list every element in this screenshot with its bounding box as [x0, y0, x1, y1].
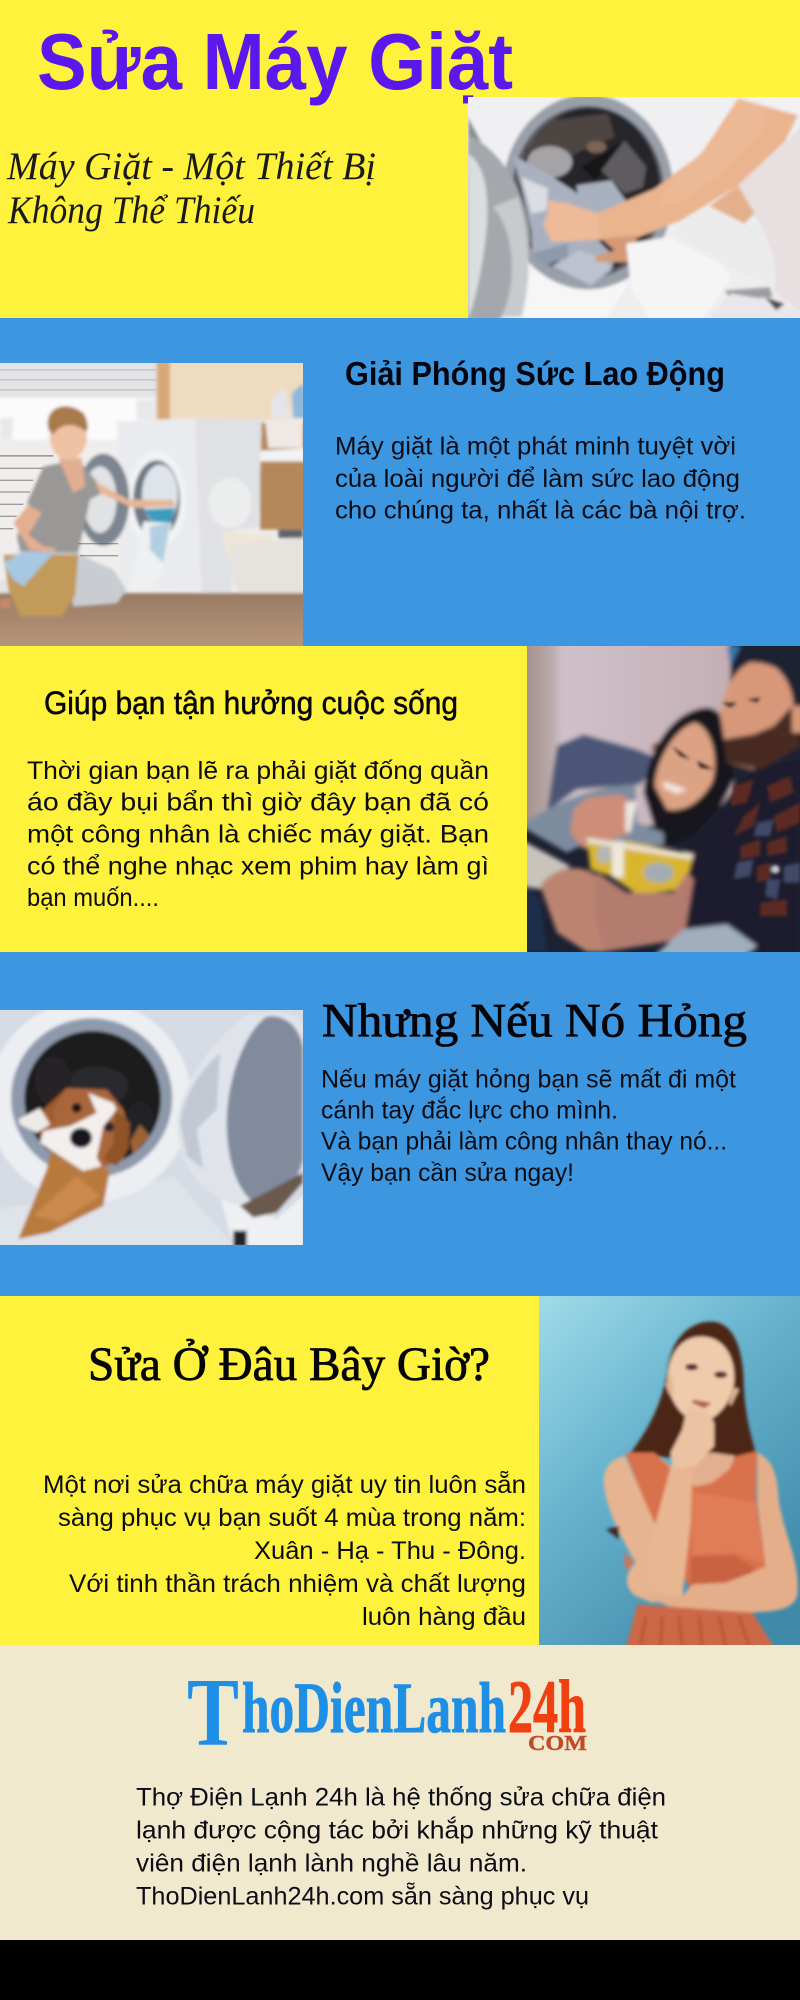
body text: viên điện lạnh lành nghề lâu năm. [136, 1850, 527, 1878]
body text: Thợ Điện Lạnh 24h là hệ thống sửa chữa điện [136, 1783, 666, 1811]
logo: hoDienLanh [242, 1668, 506, 1748]
body text: áo đầy bụi bẩn thì giờ đây bạn đã có [27, 788, 489, 816]
body text [335, 432, 746, 524]
body text: sàng phục vụ bạn suốt 4 mùa trong năm: [58, 1504, 526, 1532]
heading: Nhưng Nếu Nó Hỏng [322, 994, 747, 1048]
subtitle [6, 145, 376, 232]
photo: dog in washing machine [0, 1010, 303, 1245]
body text: Xuân - Hạ - Thu - Đông. [254, 1537, 526, 1565]
body text [27, 757, 489, 912]
logo [187, 1659, 587, 1767]
body text: cánh tay đắc lực cho mình. [321, 1096, 618, 1124]
body text: Thời gian bạn lẽ ra phải giặt đống quần [27, 757, 489, 785]
panel: freeing labour [0, 318, 800, 653]
heading: Giúp bạn tận hưởng cuộc sống [44, 685, 458, 721]
panel: enjoy life [0, 639, 800, 956]
body text: cho chúng ta, nhất là các bà nội trợ. [335, 496, 746, 524]
subtitle: Không Thể Thiếu [7, 189, 255, 232]
logo: T [187, 1659, 239, 1767]
body text: Với tinh thần trách nhiệm và chất lượng [69, 1570, 526, 1598]
body text [321, 1065, 736, 1187]
body text: bạn muốn.... [27, 884, 159, 912]
body text [43, 1470, 526, 1631]
body text: luôn hàng đầu [362, 1603, 526, 1631]
logo: 24h [508, 1666, 586, 1749]
heading: Giải Phóng Sức Lao Động [345, 355, 725, 392]
body text: một công nhân là chiếc máy giặt. Bạn [27, 820, 489, 848]
body text [136, 1783, 666, 1911]
logo: COM [528, 1731, 587, 1755]
panel: company footer [0, 1645, 800, 1940]
heading: Sửa Ở Đâu Bây Giờ? [88, 1338, 490, 1391]
title: Sửa Máy Giặt [37, 17, 513, 106]
body text: có thể nghe nhạc xem phim hay làm gì [27, 852, 489, 880]
body text: ThoDienLanh24h.com sẵn sàng phục vụ [136, 1882, 589, 1911]
panel: header [0, 0, 800, 327]
panel: where to repair [0, 1296, 800, 1649]
body text: lạnh được cộng tác bởi khắp những kỹ thuật [136, 1816, 658, 1844]
bottom black band [0, 1940, 800, 2000]
subtitle: Máy Giặt - Một Thiết Bị [6, 145, 376, 188]
body text: Một nơi sửa chữa máy giặt uy tin luôn sẵn [43, 1470, 526, 1499]
body text: Và bạn phải làm công nhân thay nó... [321, 1128, 727, 1156]
body text: Nếu máy giặt hỏng bạn sẽ mất đi một [321, 1065, 736, 1093]
photo: woman doing laundry [0, 363, 303, 646]
body text: Máy giặt là một phát minh tuyệt vời [335, 432, 736, 460]
photo: hands loading laundry into a washing machine [468, 97, 800, 318]
photo: thoughtful woman [539, 1296, 800, 1645]
body text: của loài người để làm sức lao động [335, 465, 740, 493]
panel: when it breaks [0, 952, 800, 1296]
photo: couple eating popcorn [527, 646, 800, 952]
body text: Vậy bạn cần sửa ngay! [321, 1159, 574, 1187]
